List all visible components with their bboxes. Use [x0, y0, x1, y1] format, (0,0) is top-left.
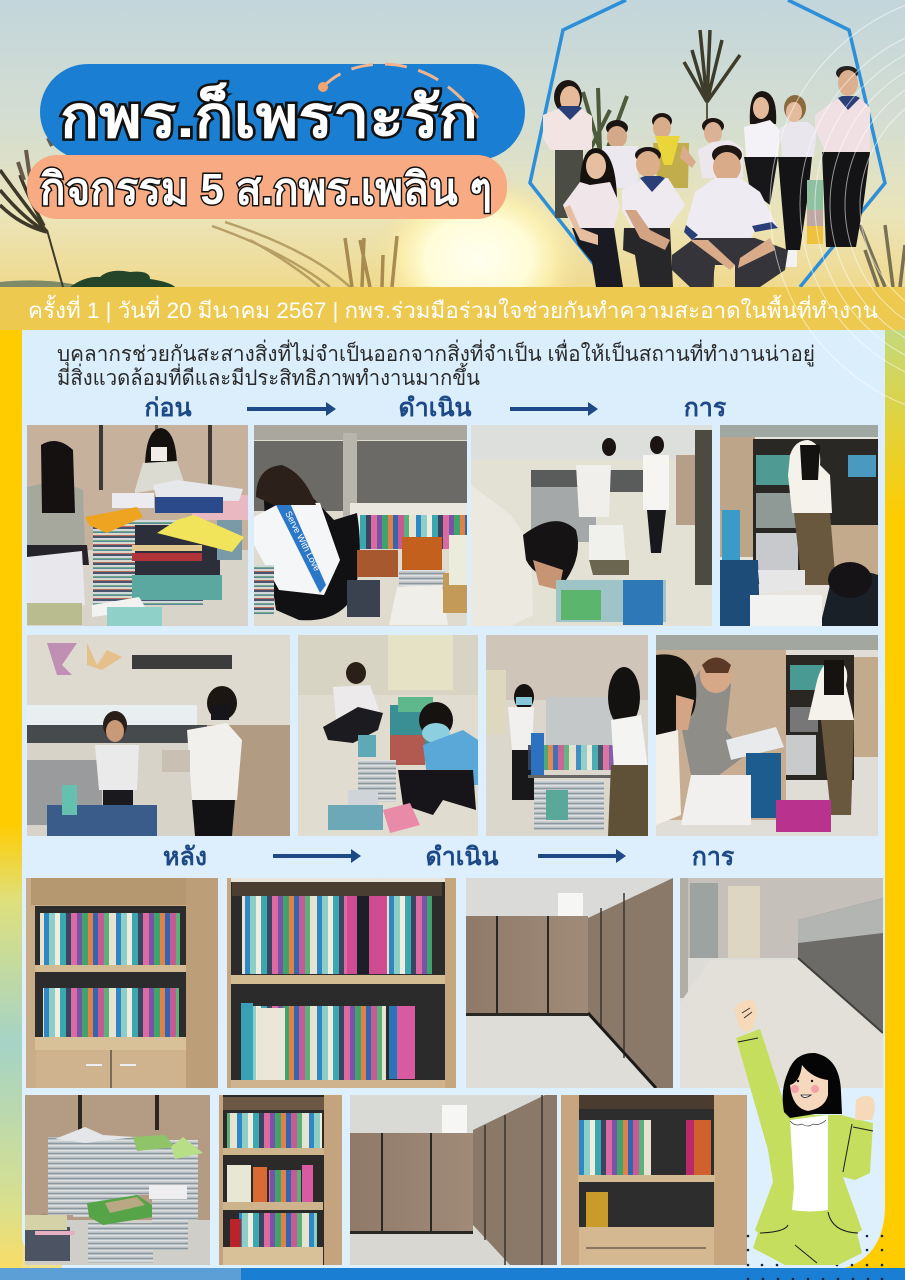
main content panel [22, 330, 885, 1268]
description text: มีสิ่งแวดล้อมที่ดีและมีประสิทธิภาพทำงานมากขึ้น [57, 363, 480, 390]
sky background with sunset [0, 0, 905, 340]
photo: staff in sash sorting books on floor: Serve With Love [283, 509, 322, 573]
heading row: before the activity [144, 394, 727, 422]
photo: staff sorting piles of books [27, 425, 248, 626]
date banner: ครั้งที่ 1 | วันที่ 20 มีนาคม 2567 | กพร.ร่วมมือร่วมใจช่วยกันทำความสะอาดในพื้นที่ทำงาน [28, 295, 878, 323]
title pill: main heading [40, 64, 525, 160]
dot pattern [747, 1235, 883, 1280]
person: woman back left [543, 80, 592, 218]
photo: staff reading book at shelf [656, 635, 878, 836]
photo: lockers in the aisle [350, 1095, 557, 1265]
person: man front right [672, 145, 788, 287]
photo: staff sorting books in the office aisle [471, 425, 712, 626]
heading row: after the activity: หลัง [163, 843, 207, 871]
photo: two staff checking a book in the office [27, 635, 290, 836]
decorative arcs [770, 0, 905, 420]
heading row: before the activity: การ [684, 394, 727, 422]
description text: บุคลากรช่วยกันสะสางสิ่งที่ไม่จำเป็นออกจากสิ่งที่จำเป็น เพื่อให้เป็นสถานที่ทำงานน่าอยู่ [57, 339, 815, 367]
right side strip [885, 330, 905, 1280]
person: woman front left [563, 148, 623, 287]
heading row: before the activity: ก่อน [144, 394, 192, 422]
photo: stacks of sorted books [25, 1095, 210, 1265]
hexagon frame with staff group photo [530, 0, 885, 287]
heading row: after the activity [163, 843, 735, 871]
photo: staff at bookshelf [720, 425, 878, 626]
photo: staff in sash sorting books on floor [254, 425, 467, 626]
person: woman back right 2 [778, 95, 823, 267]
photo: tidy cabinet with books [26, 878, 218, 1088]
photo: staff with a book trolley [486, 635, 648, 836]
heading row: after the activity: การ [692, 843, 735, 871]
corner accent bottom right [845, 1205, 905, 1268]
person: woman back centre [698, 118, 743, 178]
person: man back centre left [603, 120, 638, 188]
heading row: after the activity: ดำเนิน [426, 843, 498, 871]
photo: two staff sorting books on the floor [298, 635, 478, 836]
person: man far right [815, 66, 870, 247]
subtitle pill: กิจกรรม 5 ส.กพร.เพลิน ๆ [40, 165, 492, 214]
person: man with yellow scarf [652, 113, 696, 188]
heading row: before the activity: ดำเนิน [398, 394, 472, 422]
description text [57, 339, 815, 390]
photo: narrow cabinet with three shelves [219, 1095, 342, 1265]
photo: open cabinet with large books [227, 878, 456, 1088]
photo: half-empty cabinet [561, 1095, 747, 1265]
date banner [0, 287, 905, 330]
photo: empty aisle with lockers [466, 878, 673, 1088]
title pill: main heading: กพร.ก็เพราะรัก [60, 82, 478, 150]
character: woman raising fist [734, 1000, 875, 1265]
person: woman back right [744, 91, 780, 205]
corner accent bottom left [22, 1238, 62, 1268]
person: woman front centre [622, 147, 685, 287]
photo: clean corridor [680, 878, 883, 1088]
bottom bar [0, 1268, 905, 1280]
left side strip [0, 330, 22, 1280]
